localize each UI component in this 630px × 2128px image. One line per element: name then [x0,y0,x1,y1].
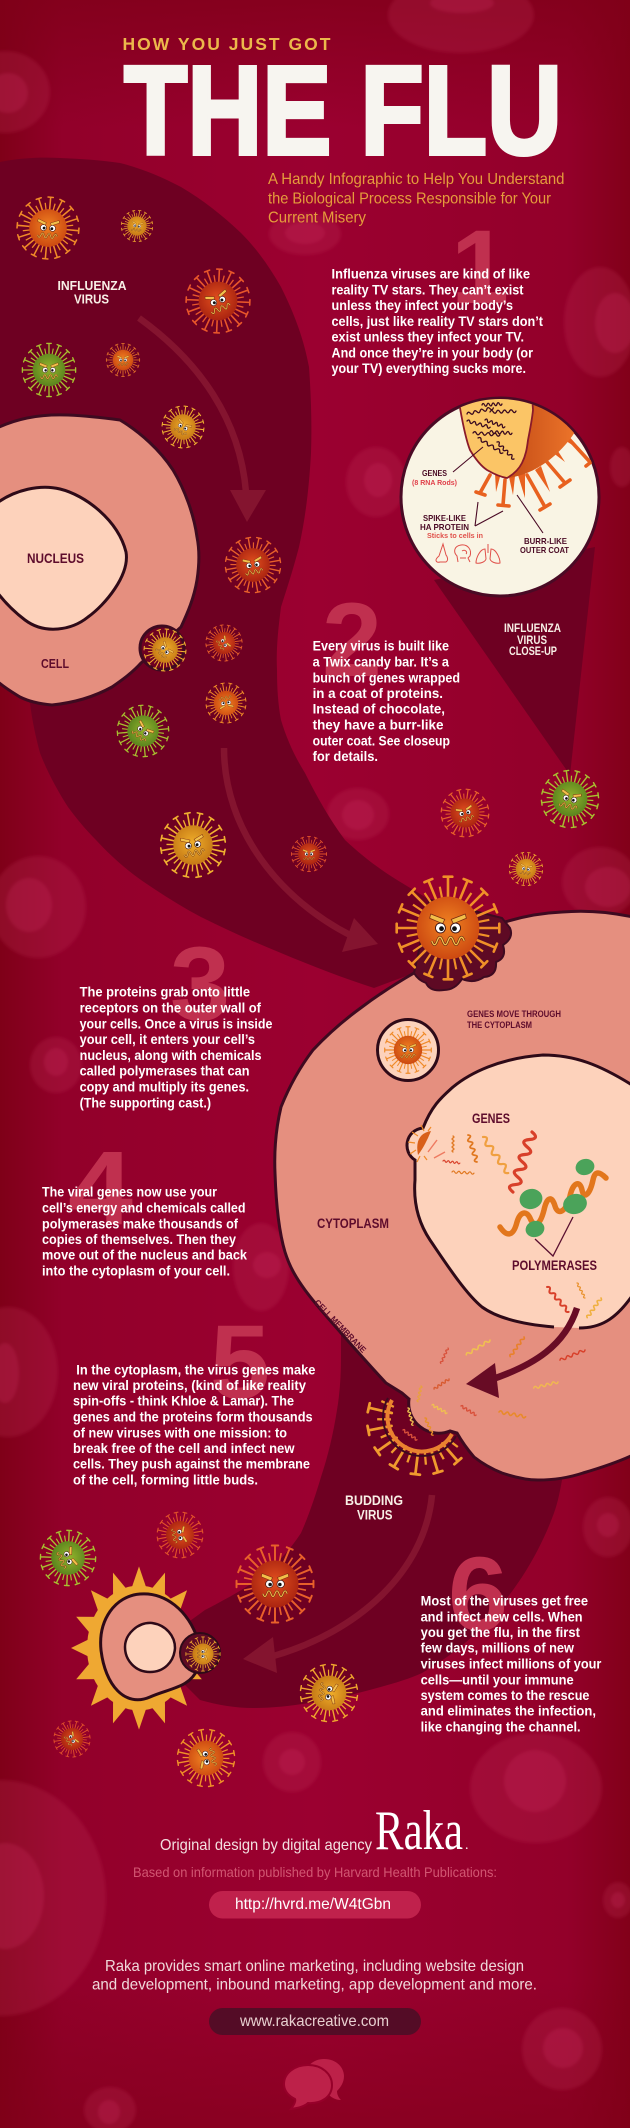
step 1 text [332,265,543,376]
step 5 text: spin-offs - think Khloe & Lamar). The [73,1393,294,1409]
burr label: OUTER COAT [520,545,570,555]
vesicle with virus [378,1020,438,1080]
close-up beam [434,547,595,775]
polymerase strand [500,1157,606,1239]
lower dark infection pathway [150,1330,562,1708]
burr label [520,536,570,555]
step 5 text [73,1361,316,1487]
subtitle: the Biological Process Responsible for Your [268,190,552,207]
arrow: new virus leaves cell [243,1495,432,1673]
step 6 text: like changing the channel. [421,1718,581,1734]
close-up caption: VIRUS [517,635,547,647]
step 5 text: of new viruses with one mission: to [73,1424,287,1440]
burr spikes [495,424,582,498]
genes label: GENES [472,1111,510,1126]
step 2 text: bunch of genes wrapped [313,669,460,685]
polymerases label: POLYMERASES [512,1258,597,1273]
spike label: Sticks to cells in [427,531,483,540]
logo: Raka: Raka [375,1800,463,1862]
subtitle [268,171,564,226]
receptor pocket [414,900,511,990]
step 6 text: Most of the viruses get free [421,1593,588,1609]
step 3 text: called polymerases that can [80,1063,249,1079]
step 6 text: and eliminates the infection, [421,1703,596,1719]
nucleus [0,487,126,629]
genes leaving nucleus [402,1283,602,1441]
step numbers: 6 [448,1536,508,1653]
website pill [209,2008,421,2035]
step 6 text: few days, millions of new [421,1640,574,1656]
step 1 text: And once they’re in your body (or [332,344,533,360]
step numbers: 2 [322,582,382,699]
step numbers [68,209,509,1653]
source line: Based on information published by Harvard Health Publications: [133,1864,497,1880]
burst rays [71,1566,205,1730]
close-up caption: CLOSE-UP [509,646,557,658]
icon: lungs [476,544,500,563]
spike label [420,513,483,540]
step 3 text [80,984,273,1110]
spike label: HA PROTEIN [420,522,469,532]
genes move label: GENES MOVE THROUGH [467,1009,561,1020]
logo: Raka: . [465,1838,468,1853]
cell body [0,415,199,705]
step 4 text: cell’s energy and chemicals called [42,1199,246,1215]
icon: speech bubbles [284,2059,344,2109]
arrow: genes exit nucleus [466,1308,577,1398]
genes label: (8 RNA Rods) [412,478,457,487]
step 2 text [313,638,460,764]
source link pill [209,1891,421,1918]
genes label [412,468,457,487]
close-up circle [401,395,600,596]
step 1 text: Influenza viruses are kind of like [332,265,530,281]
subtitle: A Handy Infographic to Help You Understand [268,171,564,188]
cytoplasm label: CYTOPLASM [317,1216,389,1231]
step 2 text: Every virus is built like [313,638,449,654]
step 2 text: outer coat. See closeup [313,732,450,748]
step 3 text: your cell, it enters your cell’s [80,1031,255,1047]
step 1 text: exist unless they infect your TV. [332,328,524,344]
budding virus label [345,1493,403,1522]
agency description: Raka provides smart online marketing, including website design [105,1958,524,1975]
step 3 text: your cells. Once a virus is inside [80,1016,273,1032]
bud pocket [180,1633,220,1673]
step 3 text: receptors on the outer wall of [80,1000,261,1016]
source link pill: http://hvrd.me/W4tGbn [235,1896,391,1913]
nucleus [407,1055,630,1328]
close-up caption [504,623,561,658]
step 2 text: a Twix candy bar. It’s a [313,654,449,670]
arrow: virus moves to next cell [224,748,378,952]
agency description [92,1958,537,1994]
step 6 text [421,1593,602,1734]
step 3 text: nucleus, along with chemicals [80,1047,262,1063]
step 4 text: copies of themselves. Then they [42,1231,236,1247]
step 6 text: system comes to the rescue [421,1687,590,1703]
step 5 text: cells. They push against the membrane [73,1456,310,1472]
cell membrane label: CELL MEMBRANE [313,1297,369,1355]
polymerase pointers [535,1217,573,1256]
kicker: HOW YOU JUST GOT [122,34,331,54]
burr label: BURR-LIKE [524,536,567,546]
step 5 text: genes and the proteins form thousands [73,1409,313,1425]
genes label: GENES [422,468,447,478]
agency description: and development, inbound marketing, app development and more. [92,1976,537,1994]
icon: nose [436,544,448,562]
nucleus label: NUCLEUS [27,550,84,566]
step 3 text: copy and multiply its genes. [80,1079,249,1095]
step 4 text: into the cytoplasm of your cell. [42,1263,230,1279]
gene strands in nucleus [443,1131,537,1194]
close-up leader lines [453,447,543,533]
cell body [275,911,630,1480]
small nucleus [125,1623,175,1672]
small cell body [101,1594,198,1700]
step 5 text: new viral proteins, (kind of like reality [73,1377,306,1393]
step 2 text: Instead of chocolate, [313,701,445,717]
genes move label: THE CYTOPLASM [467,1020,532,1031]
step numbers: 5 [210,1304,270,1421]
step 1 text: unless they infect your body’s [332,297,513,313]
cell label: CELL [41,656,69,671]
budding virus spikes [368,1401,461,1475]
arrow: virus approaches cell [139,318,266,522]
influenza virus label: VIRUS [74,292,109,306]
step 1 text: reality TV stars. They can’t exist [332,281,524,297]
ha protein spikes [476,437,596,510]
step 2 text: they have a burr-like [313,717,444,733]
step numbers: 4 [68,1130,133,1247]
step 1 text: your TV) everything sucks more. [332,360,526,376]
influenza virus label [58,278,127,306]
cell one [0,415,199,705]
subtitle: Current Misery [268,209,366,226]
budding virus label: VIRUS [357,1508,392,1522]
step numbers: 1 [451,209,509,326]
large cell [275,900,630,1480]
virus coat [508,404,574,478]
step 6 text: you get the flu, in the first [421,1624,580,1640]
upper dark infection pathway [0,158,470,988]
step numbers: 3 [170,926,230,1043]
infected small cell [71,1566,220,1730]
step 6 text: cells—until your immune [421,1671,574,1687]
step 1 text: cells, just like reality TV stars don’t [332,313,543,329]
step 4 text [42,1184,247,1279]
step 5 text: break free of the cell and infect new [73,1440,295,1456]
step 2 text: in a coat of proteins. [313,685,443,701]
step 3 text: The proteins grab onto little [80,984,250,1000]
step 4 text: move out of the nucleus and back [42,1246,247,1262]
virus bud in membrane [140,626,184,670]
close-up caption: INFLUENZA [504,623,561,635]
genes move label [467,1009,561,1031]
spike label: SPIKE-LIKE [423,513,466,523]
budding virus label: BUDDING [345,1493,403,1508]
step 5 text: of the cell, forming little buds. [73,1471,258,1487]
credit line [160,1800,468,1862]
influenza virus label: INFLUENZA [58,278,127,293]
gene rods [467,403,516,460]
step 2 text: for details. [313,748,378,764]
icon: head [455,545,471,562]
credit line: Original design by digital agency [160,1837,372,1854]
step 3 text: (The supporting cast.) [80,1094,211,1110]
step 6 text: and infect new cells. When [421,1608,583,1624]
step 6 text: viruses infect millions of your [421,1656,602,1672]
virus core [458,395,533,478]
influenza viruses [15,195,605,1791]
website pill: www.rakacreative.com [239,2013,389,2030]
step 5 text: In the cytoplasm, the virus genes make [76,1361,316,1377]
virus entering nucleus [408,1125,445,1162]
step 4 text: polymerases make thousands of [42,1215,238,1231]
title block [122,34,564,226]
step 4 text: The viral genes now use your [42,1184,217,1200]
